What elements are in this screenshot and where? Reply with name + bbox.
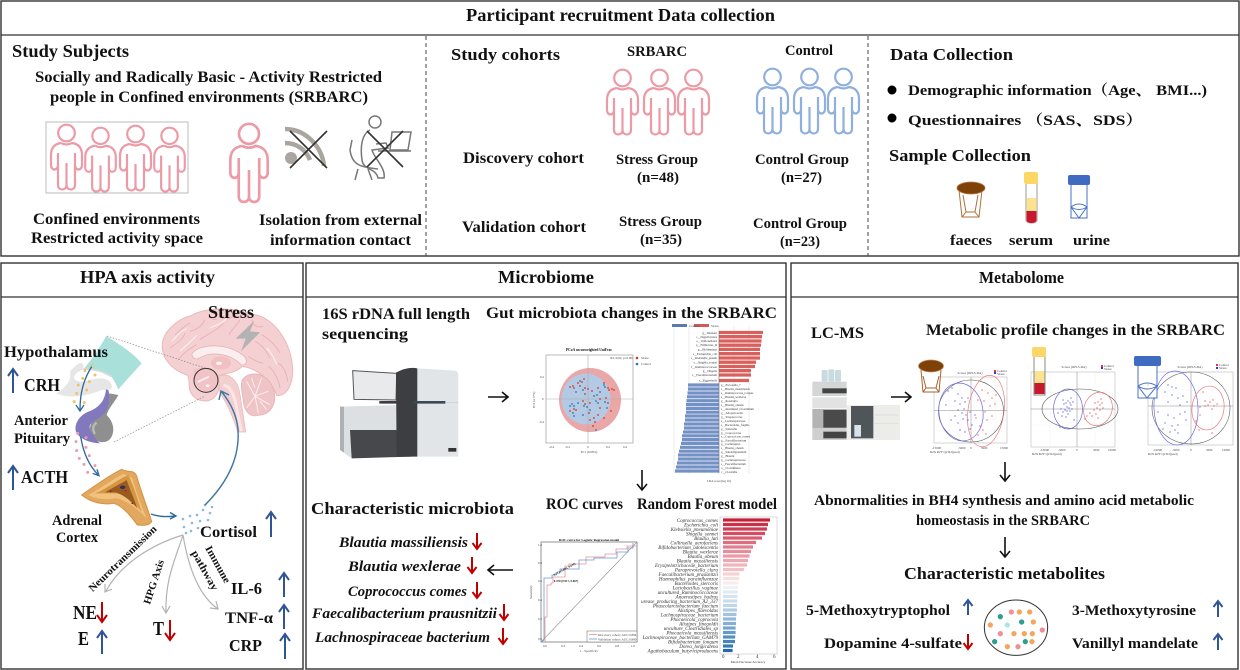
- chart: random forest importance: Shigella_sonnei: [686, 532, 719, 538]
- chart: LEfSe diverging bars: g__Oligella: [703, 369, 718, 373]
- arrow: to abnormalities: [1000, 462, 1010, 481]
- chart: random forest importance: unculture_Clostridiales_sp: [664, 627, 718, 632]
- dots and arrow: ACTH release: [76, 433, 99, 476]
- chart: random forest importance: 0: [722, 655, 725, 660]
- text: isolation: [259, 212, 423, 249]
- chart: LEfSe diverging bars: s__Shigella_sonnei: [694, 360, 717, 364]
- chart: serum OPLS-DA: 5000: [1093, 448, 1100, 452]
- chart: serum OPLS-DA: 10000: [1108, 448, 1116, 452]
- chart: ROC curves: 0.272 (0.892, 0.630): [553, 562, 576, 577]
- text: isolation: Isolation from external: [259, 212, 423, 229]
- label: neurotransmission: Neurotransmission: [87, 524, 160, 594]
- labels: hormones and arrows: NE: [73, 602, 97, 624]
- chart: ROC curves: 0.6: [597, 644, 601, 648]
- heading: random forest model: Random Forest model: [637, 496, 778, 513]
- labels: hormones and arrows: E: [78, 628, 89, 650]
- chart: random forest importance: Lachnospiraceae_bacterium_GAM79: [641, 636, 718, 641]
- labels: metabolites: 5-Methoxytryptophol: [806, 603, 950, 619]
- chart: serum OPLS-DA: -10000: [1040, 448, 1049, 452]
- chart: random forest importance: 4: [756, 655, 759, 660]
- chart: PCoA scatter: Stress: [641, 356, 649, 360]
- text: isolation: information contact: [270, 232, 412, 249]
- label: anterior pituitary: Pituitary: [14, 431, 71, 447]
- chart: PCoA scatter: -0.4: [549, 445, 554, 449]
- chart: LEfSe diverging bars: g__Prevotella_7: [721, 383, 741, 387]
- label: stress: Stress: [208, 302, 254, 322]
- chart: LEfSe diverging bars: g__Lachnospiraceae: [721, 458, 746, 462]
- text: abnormalities: homeostasis in the SRBARC: [916, 513, 1090, 529]
- chart: LEfSe diverging bars: s__Blautia_obeum: [721, 403, 744, 407]
- chart: PCoA scatter: -0.2: [565, 445, 570, 449]
- labels: hormones and arrows: TNF-α: [225, 610, 273, 627]
- chart: serum OPLS-DA: -5000: [1058, 448, 1066, 452]
- text: 16S rDNA: [322, 306, 470, 343]
- panel: metabolome: [791, 263, 1238, 669]
- text: 16S rDNA: 16S rDNA full length: [322, 306, 470, 323]
- validation stress group: (n=35): [640, 232, 682, 248]
- chart: serum OPLS-DA: Scores (OPLS-DA): [1062, 365, 1086, 369]
- chart: ROC curves: 0.8: [538, 561, 542, 565]
- labels: hormones and arrows: Hypothalamus: [4, 344, 108, 361]
- illustration: zoom guide lines: [107, 336, 205, 442]
- illustration: hypothalamus: [57, 336, 142, 411]
- icon: control group people: [757, 69, 859, 134]
- heading: characteristic microbiota: Characteristic microbiota: [311, 499, 515, 518]
- icon: serum tube small: [1032, 347, 1046, 395]
- chart: PCoA scatter: PCoA on unweighted UniFrac: [566, 348, 612, 352]
- chart: serum OPLS-DA: R2X R2Y Q2 R2(pred): [1032, 452, 1062, 456]
- discovery stress group: Stress Group: [616, 152, 698, 168]
- icon: faeces cup: [957, 182, 985, 217]
- chart: random forest importance: 2: [737, 655, 740, 660]
- chart: PCoA scatter: [532, 348, 651, 454]
- chart: ROC curves: 1 - Specificity: [580, 649, 598, 653]
- chart: random forest importance: Phascolarctobacterium_faecium: [652, 604, 718, 610]
- validation control group: Control Group: [753, 216, 847, 232]
- label: immune pathway: [189, 544, 232, 593]
- chart: LEfSe diverging bars: g__Blautia: [721, 454, 735, 458]
- chart: faeces OPLS-DA: Stress: [997, 372, 1005, 376]
- chart: LEfSe diverging bars: [672, 324, 763, 483]
- chart: random forest importance: Alistipes_finegoldii: [678, 622, 719, 628]
- chart: serum OPLS-DA: Control: [1104, 364, 1114, 368]
- chart: random forest importance: uncultured_Ruminococcaceae: [658, 591, 719, 596]
- chart: random forest importance: Bifidobacterium_longum: [668, 640, 718, 646]
- illustration: pituitary: [76, 389, 118, 443]
- chart: random forest importance: Mean Decrease Accuracy: [731, 660, 766, 664]
- section: study cohorts: [451, 43, 859, 250]
- text: LC-MS: LC-MS: [811, 325, 864, 342]
- chart: ROC curves: 0.4: [538, 598, 542, 602]
- dots: CRH: [74, 365, 95, 403]
- labels: hormones and arrows: CRH: [24, 375, 60, 395]
- discovery control group: (n=27): [781, 170, 822, 186]
- text: confined environments: Confined environments: [33, 211, 200, 228]
- text: 16S rDNA: sequencing: [322, 326, 408, 343]
- chart: serum OPLS-DA: [1031, 364, 1118, 456]
- icon: faeces cup small: [918, 360, 944, 392]
- text: confined environments: [31, 211, 203, 247]
- chart: PCoA scatter: 0.2: [540, 375, 544, 379]
- chart: random forest importance: Haemophilus_parainfluenzae: [658, 578, 719, 582]
- arrow: LC-MS to plots: [891, 392, 911, 402]
- validation control group: [753, 216, 847, 250]
- chart: LEfSe diverging bars: s__uncultured_Clostridium: [721, 407, 754, 411]
- chart: urine OPLS-DA: -10000: [1153, 448, 1162, 452]
- chart: ROC curves: 0.6: [538, 579, 542, 583]
- chart: LEfSe diverging bars: g__Sutterella: [721, 427, 738, 431]
- arrow: down to ROC: [637, 470, 647, 490]
- chart: LEfSe diverging bars: p__Firmicutes_D: [696, 343, 718, 347]
- chart: LEfSe diverging bars: s__Klebsiella_pneum: [691, 356, 718, 360]
- list: characteristic taxa: Lachnospiraceae bacterium: [314, 630, 490, 646]
- chart: ROC curves: Validation cohort: AUC:0.880: [598, 638, 637, 642]
- labels: hormones and arrows: [4, 344, 290, 659]
- text: SRBARC definition: [35, 69, 382, 106]
- label: immune pathway: Immune: [202, 544, 232, 586]
- chart: urine OPLS-DA: Stress: [1219, 366, 1227, 370]
- chart: PCoA scatter: 0.2: [606, 445, 610, 449]
- chart: PCoA scatter: R2=0.02, p=0.001: [610, 356, 634, 361]
- arrow: hypothalamus to pituitary: [76, 367, 92, 411]
- label: anterior pituitary: [14, 413, 71, 447]
- chart: random forest importance: Bifidobacterium_adolescentis: [658, 546, 718, 551]
- labels: hormones and arrows: CRP: [229, 636, 262, 655]
- chart: faeces OPLS-DA: [930, 369, 1009, 454]
- icon: isolated person: [230, 124, 268, 202]
- panel: microbiome: [306, 263, 786, 669]
- chart: random forest importance: urease_producing_bacterium_A2_337: [641, 600, 718, 605]
- chart: LEfSe diverging bars: Control: [689, 324, 699, 328]
- labels: sample types: urine: [1073, 233, 1110, 249]
- icon: serum tube: [1024, 172, 1038, 223]
- text: confined environments: Restricted activity space: [31, 230, 203, 247]
- labels: sample types: [950, 233, 1110, 249]
- chart: ROC curves: Sensitivity: [529, 585, 533, 599]
- chart: LEfSe diverging bars: s__Faecalibacterium: [721, 462, 746, 466]
- panel: participant recruitment and data collection: [1, 1, 1239, 256]
- chart: LEfSe diverging bars: g__Dialister: [702, 331, 717, 335]
- chart: LEfSe diverging bars: LDA score(log 10): [707, 479, 731, 483]
- label: HPG axis: HPG Axis: [142, 559, 167, 606]
- bullet: questionnaires: Questionnaires （SAS、SDS）: [908, 112, 1143, 129]
- chart: PCoA scatter: -0.2: [539, 420, 544, 424]
- arrow: to characteristic metabolites: [1000, 537, 1010, 557]
- illustration: sequencer: [340, 368, 458, 458]
- chart: faeces OPLS-DA: Scores (OPLS-DA): [958, 371, 982, 375]
- heading: characteristic metabolites: Characteristic metabolites: [904, 564, 1105, 583]
- chart: LEfSe diverging bars: s__Blautia_wexlerae: [721, 395, 747, 399]
- chart: random forest importance: Klebsiella_pneumoniae: [670, 528, 719, 533]
- chart: urine OPLS-DA: 5000: [1206, 448, 1213, 452]
- chart: PCoA scatter: 0: [542, 397, 544, 401]
- icon: stress group people: [607, 70, 709, 134]
- chart: LEfSe diverging bars: s__Bacteroides_fragilis: [721, 423, 750, 427]
- chart: random forest importance: Blautia_obeum: [687, 555, 718, 560]
- chart: LEfSe diverging bars: s__Eggerthella: [699, 378, 718, 382]
- chart: random forest importance: Escherichia_coli: [683, 524, 719, 528]
- validation control group: (n=23): [780, 234, 820, 250]
- chart: random forest importance: Phocaeicola_coprocola: [669, 618, 718, 623]
- label: control column: Control: [785, 43, 833, 59]
- chart: LEfSe diverging bars: s__Blautia_massiliensis: [721, 387, 751, 391]
- chart: random forest importance: 6: [773, 655, 776, 660]
- icon: urine container: [1068, 175, 1090, 218]
- chart: LEfSe diverging bars: o__Veillonellales: [696, 339, 718, 343]
- labels: hormones and arrows: ACTH: [21, 467, 68, 487]
- chart: LEfSe diverging bars: s__Blautia_obeum: [721, 446, 744, 450]
- heading: HPA axis: HPA axis activity: [80, 267, 215, 287]
- chart: ROC curves: [529, 538, 637, 653]
- chart: ROC curves: 1.0: [631, 644, 635, 648]
- arrows: pathways: [105, 535, 218, 613]
- chart: urine OPLS-DA: -5000: [1172, 448, 1180, 452]
- text: metabolic profile: Metabolic profile changes in the SRBARC: [926, 322, 1225, 339]
- label: adrenal cortex: Adrenal: [52, 513, 102, 529]
- chart: ROC curves: Discovery cohort: AUC:0.884: [598, 633, 637, 637]
- chart: urine OPLS-DA: 10000: [1222, 448, 1230, 452]
- chart: PCoA scatter: 0.4: [623, 445, 627, 449]
- arrow: sequencing to plots: [488, 392, 508, 402]
- chart: ROC curves: 0.0: [543, 644, 547, 648]
- icon: no computer work: [350, 116, 411, 180]
- chart: random forest importance: Faecalibacterium_prausnitzii: [658, 573, 719, 578]
- labels: metabolites: 3-Methoxytyrosine: [1072, 603, 1196, 619]
- heading: study cohorts: Study cohorts: [451, 45, 560, 64]
- icon: confined group of people: [46, 122, 188, 193]
- chart: LEfSe diverging bars: s__Faecalibacterium: [692, 373, 718, 377]
- chart: ROC curves: 0.0: [538, 637, 542, 641]
- chart: LEfSe diverging bars: s__Lachnospiraceae: [721, 419, 746, 423]
- chart: random forest importance: Dorea_longicatena: [678, 645, 718, 650]
- chart: LEfSe diverging bars: g__Subdoligranulum: [721, 450, 747, 454]
- heading: metabolome: Metabolome: [979, 268, 1064, 287]
- text: SRBARC definition: Socially and Radically Basic - Activity Restricted: [35, 69, 382, 86]
- heading: sample collection: Sample Collection: [889, 146, 1032, 165]
- list: characteristic taxa: Blautia massiliensis: [338, 535, 468, 551]
- list: characteristic taxa: Coprococcus comes: [348, 584, 467, 600]
- validation stress group: Stress Group: [619, 214, 702, 230]
- label: cortisol: Cortisol: [200, 524, 258, 541]
- chart: faeces OPLS-DA: -5000: [958, 446, 966, 450]
- labels: sample types: serum: [1009, 233, 1054, 249]
- chart: LEfSe diverging bars: g__Coprococcus: [721, 431, 742, 435]
- chart: LEfSe diverging bars: c__Negativicutes: [696, 335, 718, 339]
- chart: serum OPLS-DA: 0: [1076, 448, 1078, 452]
- discovery stress group: [616, 152, 698, 186]
- panel: HPA axis activity: [1, 263, 303, 669]
- icon: urine container small: [1134, 356, 1161, 398]
- chart: random forest importance: [641, 517, 777, 664]
- discovery stress group: (n=48): [637, 170, 679, 186]
- labels: metabolites: Dopamine 4-sulfate: [824, 636, 962, 652]
- chart: random forest importance: Paraprevotella_clara: [674, 568, 718, 574]
- discovery control group: [755, 152, 849, 186]
- chart: LEfSe diverging bars: g__Alloprevotella: [721, 411, 743, 415]
- chart: PCoA scatter: 0: [587, 445, 589, 449]
- row label: validation cohort: Validation cohort: [462, 219, 587, 236]
- chart: faeces OPLS-DA: 5000: [981, 446, 988, 450]
- list: characteristic taxa: Faecalibacterium prausnitzii: [311, 606, 498, 622]
- chart: faeces OPLS-DA: -15000: [932, 446, 941, 450]
- text: SRBARC definition: people in Confined environments (SRBARC): [50, 89, 368, 106]
- chart: LEfSe diverging bars: o__Clostridiales: [721, 466, 741, 470]
- chart: random forest importance: Alistipes_flaevoldus: [677, 609, 718, 614]
- illustration: brain: [162, 309, 293, 432]
- chart: LEfSe diverging bars: g__Roseburia: [721, 399, 738, 403]
- chart: faeces OPLS-DA: 15000: [1000, 446, 1008, 450]
- chart: LEfSe diverging bars: s__Coprococcus_comes: [721, 434, 751, 438]
- label: adrenal cortex: [52, 513, 102, 546]
- chart: faeces OPLS-DA: Control: [997, 369, 1007, 373]
- chart: faeces OPLS-DA: R2X R2Y Q2 R2(pred): [930, 450, 960, 454]
- chart: ROC curves: ROC curve for Logistic Regression model: [559, 538, 619, 542]
- discovery control group: Control Group: [755, 152, 849, 168]
- heading: study subjects: Study Subjects: [12, 41, 129, 61]
- chart: PCoA scatter: PC1 (6.08%): [581, 450, 597, 454]
- chart: ROC curves: 1.0: [538, 543, 542, 547]
- label: anterior pituitary: Anterior: [14, 413, 69, 429]
- chart: random forest importance: Erysipelotrichaceae_bacterium: [654, 564, 718, 569]
- chart: random forest importance: Blautia_wexlerae: [683, 550, 719, 556]
- validation stress group: [619, 214, 702, 248]
- arrow: adrenal to cortisol: [151, 512, 176, 519]
- label: SRBARC column: SRBARC: [627, 44, 687, 60]
- label: adrenal cortex: Cortex: [56, 530, 99, 546]
- chart: ROC curves: 0.4: [579, 644, 583, 648]
- title: Participant recruitment Data collection: [466, 5, 775, 25]
- chart: ROC curves: 0.2: [538, 617, 542, 621]
- chart: LEfSe diverging bars: s__Ruminococcus_torques: [721, 391, 754, 395]
- arrow: ROC to taxa: [488, 565, 513, 575]
- dots: cortisol: [183, 505, 212, 533]
- label: immune pathway: pathway: [189, 549, 220, 593]
- chart: random forest importance: Blautia_massiliensis: [677, 560, 718, 564]
- chart: faeces OPLS-DA: 0: [970, 446, 972, 450]
- row label: discovery cohort: Discovery cohort: [463, 150, 585, 167]
- chart: LEfSe diverging bars: g__Faecalibacterium: [721, 438, 747, 442]
- chart: random forest importance: Collinsella_aerofaciens: [670, 542, 718, 546]
- section: study subjects: [12, 41, 423, 249]
- chart: urine OPLS-DA: [1148, 363, 1233, 456]
- text: abnormalities: [814, 493, 1194, 529]
- text: gut microbiota changes: Gut microbiota changes in the SRBARC: [486, 305, 777, 322]
- labels: hormones and arrows: T: [153, 618, 165, 640]
- list: characteristic taxa: Blautia wexlerae: [347, 559, 461, 575]
- illustration: LC-MS instrument: [812, 369, 900, 440]
- chart: LEfSe diverging bars: Stress: [711, 324, 719, 328]
- chart: urine OPLS-DA: Control: [1219, 363, 1229, 367]
- chart: random forest importance: Lactobacillus_vaginae: [671, 586, 719, 592]
- text: abnormalities: Abnormalities in BH4 synthesis and amino acid metabolic: [814, 493, 1194, 509]
- icon: no wifi: [285, 129, 327, 168]
- heading: microbiome: Microbiome: [498, 267, 594, 287]
- chart: ROC curves: 0.8: [615, 644, 619, 648]
- heading: ROC curves: ROC curves: [546, 496, 623, 513]
- labels: metabolites: Vanillyl mandelate: [1072, 636, 1198, 652]
- chart: random forest importance: Agathobaculum_butyriciproducens: [647, 650, 718, 654]
- chart: urine OPLS-DA: Scores (OPLS-DA): [1178, 365, 1202, 369]
- labels: hormones and arrows: IL-6: [231, 579, 262, 598]
- chart: LEfSe diverging bars: c__Clostridia: [721, 470, 738, 474]
- chart: LEfSe diverging bars: f__Ruminococcaceae: [691, 365, 718, 369]
- labels: metabolites: [806, 600, 1222, 652]
- icon: metabolite ellipse: [984, 600, 1048, 655]
- list: characteristic taxa: [311, 533, 508, 646]
- chart: ROC curves: 0.470 (0.917, 0.667): [554, 579, 578, 583]
- chart: serum OPLS-DA: Stress: [1104, 367, 1112, 371]
- chart: ROC curves: 0.2: [561, 644, 565, 648]
- section: data collection: [888, 45, 1207, 249]
- labels: sample types: faeces: [950, 233, 992, 249]
- chart: PCoA scatter: PC2 (4.17%): [532, 392, 536, 408]
- chart: random forest importance: Coprococcus_comes: [677, 519, 718, 524]
- chart: random forest importance: Lachnospiraceae_bacterium: [660, 614, 718, 618]
- adrenal cortex: [82, 469, 152, 525]
- chart: random forest importance: Bacteroides_stercoris: [674, 582, 718, 587]
- bullet: demographic information: Demographic information（Age、 BMI...): [908, 82, 1207, 99]
- chart: urine OPLS-DA: 0: [1190, 448, 1192, 452]
- chart: PCoA scatter: Control: [641, 362, 651, 366]
- heading: data collection: Data Collection: [890, 45, 1014, 64]
- chart: random forest importance: Blautia_luti: [694, 537, 719, 542]
- chart: random forest importance: Phocaeicola_massiliensis: [665, 632, 718, 636]
- chart: LEfSe diverging bars: g__Streptococcus: [721, 415, 743, 419]
- chart: LEfSe diverging bars: g__Holdemania: [698, 348, 718, 352]
- chart: urine OPLS-DA: R2X R2Y Q2 R2(pred): [1148, 452, 1178, 456]
- chart: LEfSe diverging bars: g__Lachnospira: [721, 442, 741, 446]
- chart: random forest importance: Anaerostipes_hadrus: [675, 596, 718, 600]
- arrow: cortisol feedback to brain: [205, 391, 238, 505]
- chart: LEfSe diverging bars: s__Escherichia_coli: [693, 352, 717, 356]
